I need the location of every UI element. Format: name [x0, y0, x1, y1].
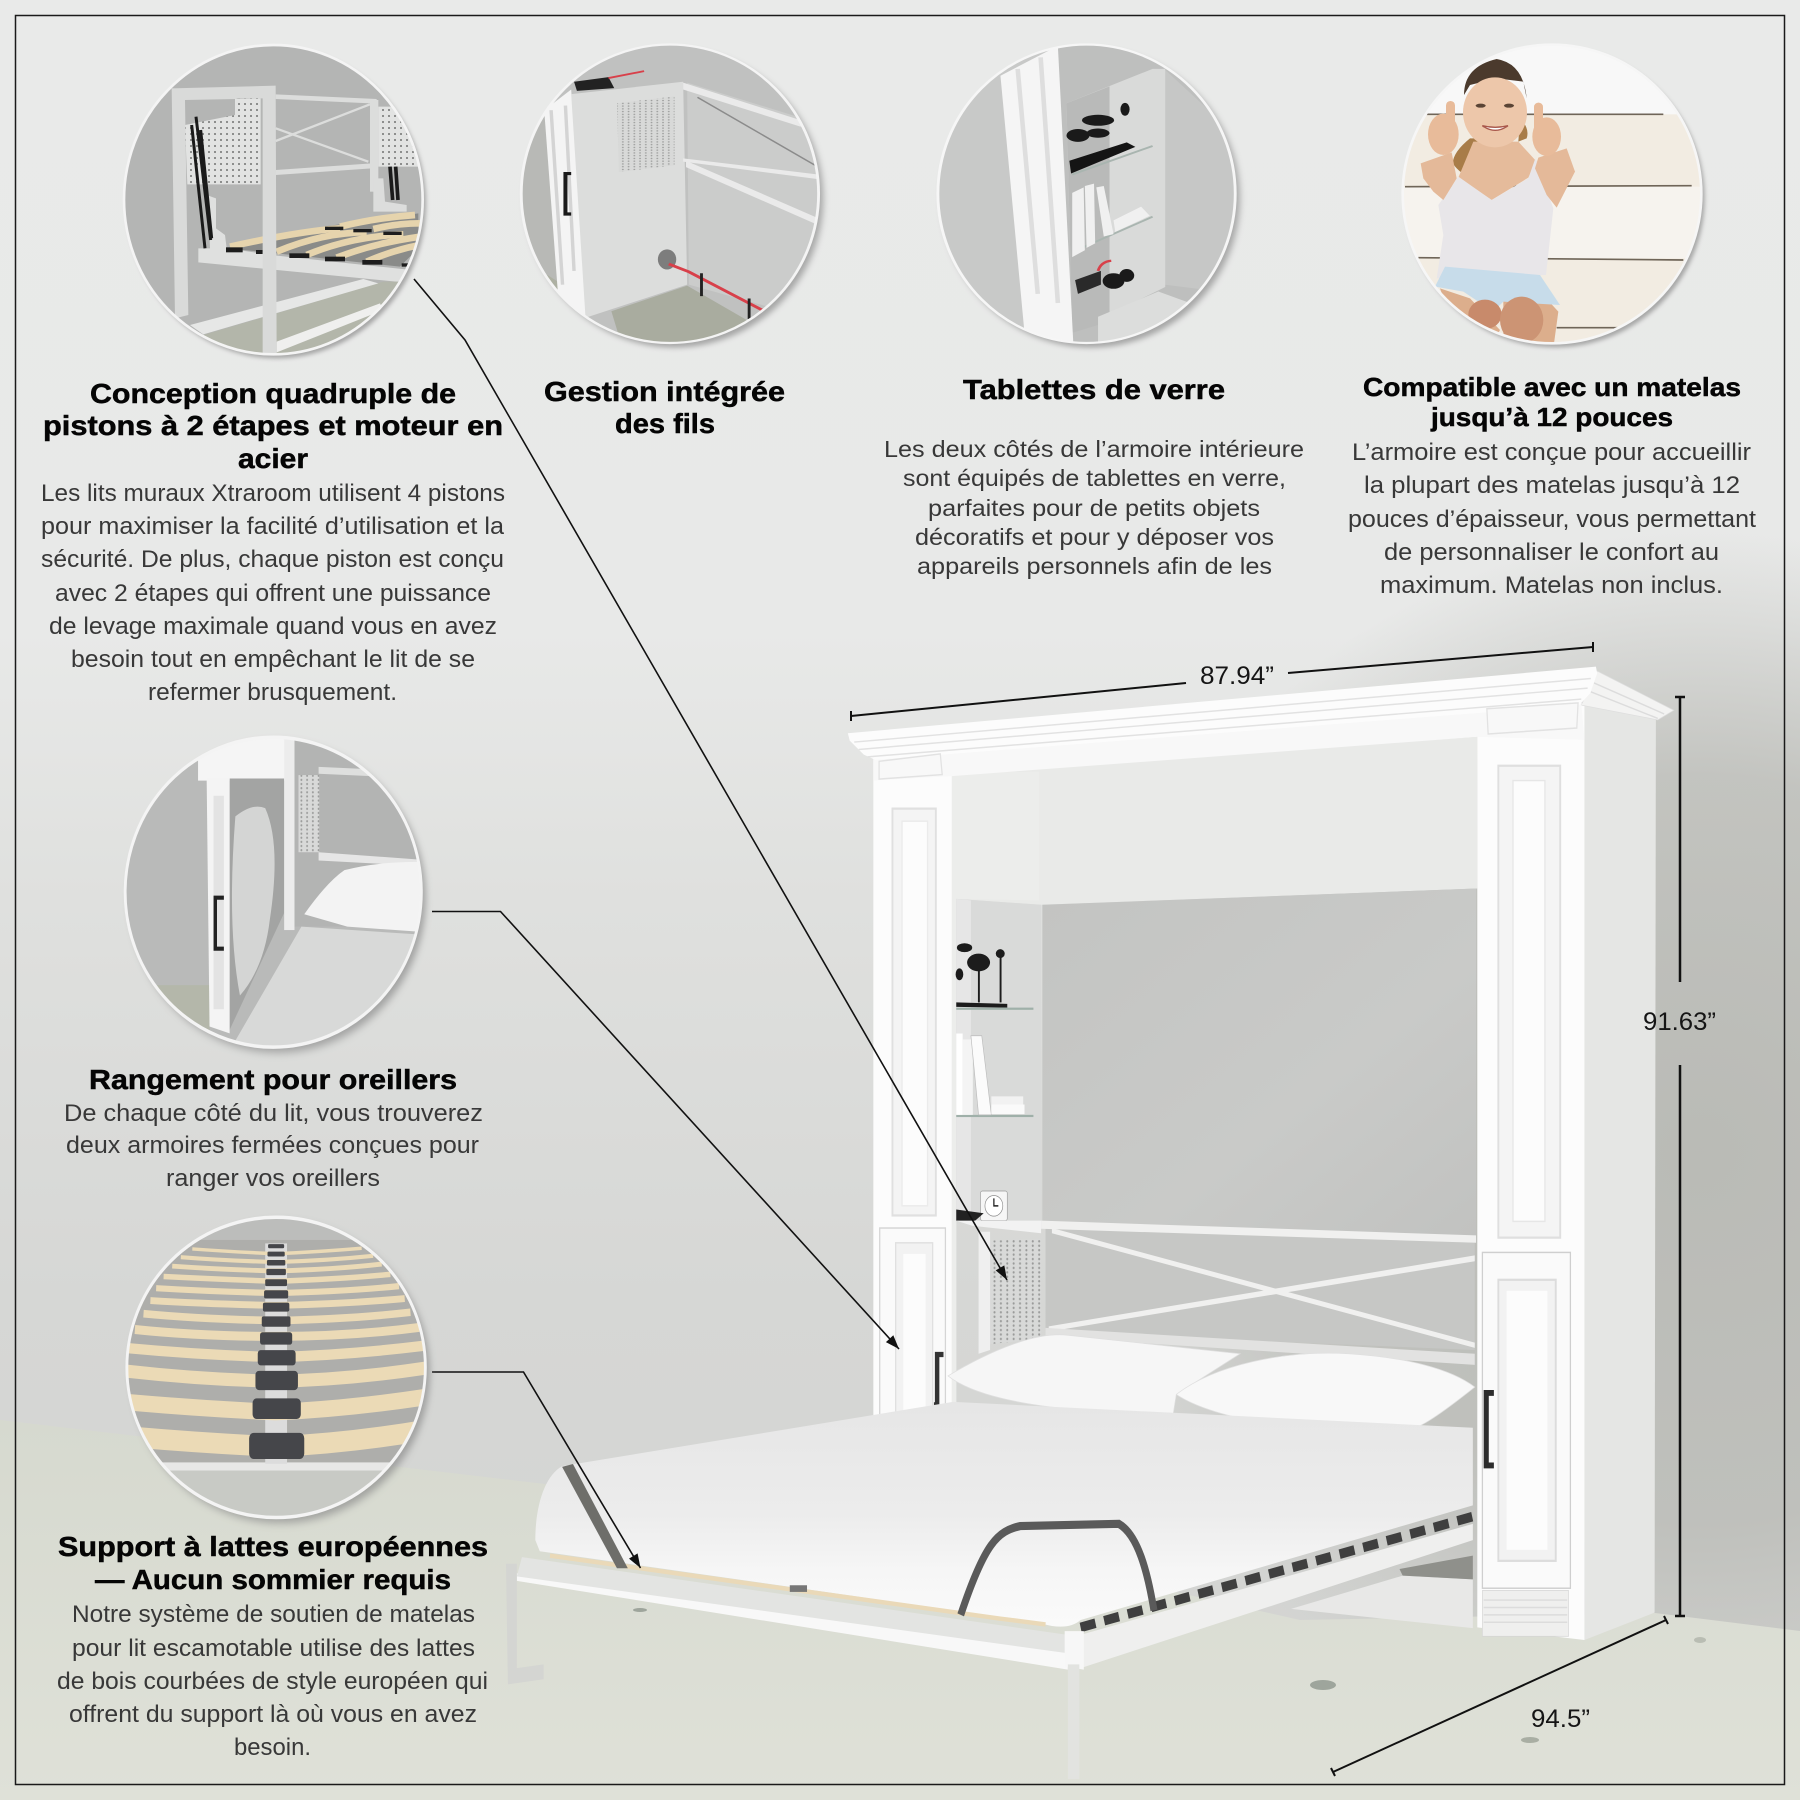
- body: glass shelves: appareils personnels afin de les: [917, 553, 1272, 579]
- left tower: [873, 755, 952, 1417]
- heading: european slats: Support à lattes européennes: [58, 1531, 488, 1562]
- heading: pillow storage: Rangement pour oreillers: [89, 1064, 457, 1095]
- body: european slats: Notre système de soutien de matelas: [72, 1601, 475, 1628]
- heading: wire management: Gestion intégrée: [544, 376, 785, 407]
- dimension: depth: [1331, 1616, 1668, 1776]
- body: mattress compatibility: pouces d’épaisseur, vous permettant: [1348, 506, 1756, 533]
- text block: european slats: [57, 1531, 488, 1761]
- right lower door: [1482, 1252, 1570, 1588]
- heading: mattress compatibility: Compatible avec un matelas: [1363, 372, 1741, 402]
- right tower: [1477, 703, 1584, 1640]
- body: glass shelves: parfaites pour de petits objets: [928, 495, 1260, 521]
- books on shelf: [956, 1033, 1024, 1115]
- cabinet interior upper back panel: [952, 737, 1477, 1409]
- heading: mattress compatibility: [1363, 372, 1741, 432]
- body: pistons: refermer brusquement.: [148, 679, 397, 706]
- circle photo: european slats: [123, 1212, 431, 1523]
- left door handle: [934, 1354, 943, 1405]
- alarm clock: [980, 1191, 1007, 1221]
- shelf nook: [956, 899, 1041, 1233]
- text block: pistons: [41, 378, 505, 706]
- body: pistons: avec 2 étapes qui offrent une puissance: [55, 580, 491, 607]
- plinth: [1482, 1590, 1569, 1636]
- bed frame rails: [506, 1524, 1473, 1779]
- heading: wire management: des fils: [615, 408, 715, 439]
- circle photo: pistons: [120, 42, 427, 358]
- sunglasses and charger: [956, 1210, 984, 1222]
- body: mattress compatibility: la plupart des matelas jusqu’à 12: [1364, 472, 1740, 499]
- background: concrete floor: [0, 1420, 1800, 1800]
- heading: pistons: acier: [238, 443, 308, 474]
- circle photo: glass shelves: [934, 41, 1242, 349]
- perforated panel: [990, 1239, 1041, 1344]
- body: pistons: pour maximiser la facilité d’utilisation et la: [41, 513, 505, 540]
- circle photo: wire management: [517, 41, 827, 349]
- headboard cross frame: [1041, 1221, 1476, 1365]
- mattress straps: [562, 1464, 1154, 1615]
- body: pistons: de levage maximale quand vous en avez: [49, 613, 497, 640]
- heading: glass shelves: Tablettes de verre: [963, 374, 1225, 405]
- circle photo: woman on mattresses: [1400, 42, 1707, 348]
- heading: mattress compatibility: jusqu’à 12 pouces: [1430, 402, 1673, 432]
- left leg: [506, 1564, 544, 1684]
- dimension: width: [851, 642, 1593, 721]
- heading: pistons: [43, 378, 503, 474]
- circle photo: pillow storage: [121, 734, 428, 1057]
- body: pillow storage: [64, 1100, 483, 1192]
- body: pillow storage: deux armoires fermées conçues pour: [66, 1132, 479, 1159]
- body: pistons: sécurité. De plus, chaque piston est conçu: [41, 546, 504, 573]
- body: pistons: [41, 480, 505, 706]
- body: pillow storage: De chaque côté du lit, vous trouverez: [64, 1100, 483, 1127]
- dimension label: 94.5: 94.5”: [1531, 1705, 1590, 1733]
- dimension label: 91.63: 91.63”: [1643, 1008, 1716, 1036]
- grey lower wall panel: [1046, 1228, 1475, 1350]
- body: glass shelves: sont équipés de tablettes en verre,: [903, 465, 1286, 491]
- crown molding: [848, 667, 1674, 781]
- bed under-panel: [1291, 1556, 1473, 1628]
- dimension label: 87.94: 87.94”: [1200, 662, 1274, 690]
- left inner side: [952, 772, 1039, 1409]
- leader arrow: slats: [432, 1372, 640, 1568]
- wall bed illustration: [506, 667, 1674, 1779]
- heading: wire management: [544, 376, 785, 439]
- body: european slats: offrent du support là où vous en avez: [69, 1701, 477, 1728]
- decorative birds on shelf: [956, 943, 1007, 1008]
- wood edge: [550, 1556, 1046, 1624]
- body: european slats: pour lit escamotable utilise des lattes: [72, 1635, 475, 1662]
- body: pillow storage: ranger vos oreillers: [166, 1165, 380, 1192]
- mattress: [535, 1402, 1473, 1627]
- body: mattress compatibility: de personnaliser le confort au: [1384, 539, 1719, 566]
- heading: pistons: Conception quadruple de: [90, 378, 456, 409]
- text block: glass shelves: [884, 374, 1304, 579]
- front leg: [1068, 1664, 1079, 1779]
- body: glass shelves: [884, 436, 1304, 579]
- body: glass shelves: Les deux côtés de l’armoire intérieure: [884, 436, 1304, 462]
- pillows: [948, 1335, 1475, 1437]
- text block: pillow storage: [64, 1064, 483, 1192]
- dimension: height: [1675, 697, 1685, 1616]
- body: glass shelves: décoratifs et pour y déposer vos: [915, 524, 1274, 550]
- heading: european slats: — Aucun sommier requis: [95, 1564, 451, 1595]
- body: mattress compatibility: maximum. Matelas non inclus.: [1380, 572, 1723, 599]
- heading: european slats: [58, 1531, 488, 1595]
- text block: mattress compatibility: [1348, 372, 1756, 599]
- bed slats along rail: [1081, 1516, 1473, 1627]
- body: european slats: de bois courbées de style européen qui: [57, 1668, 488, 1695]
- body: mattress compatibility: L’armoire est conçue pour accueillir: [1352, 439, 1751, 466]
- body: pistons: Les lits muraux Xtraroom utilisent 4 pistons: [41, 480, 505, 507]
- glass shelves: [956, 1008, 1033, 1117]
- cabinet right side face: [1581, 703, 1656, 1640]
- grey back wall panel: [1042, 889, 1476, 1241]
- heading: pistons: pistons à 2 étapes et moteur en: [43, 410, 503, 441]
- leader arrow: pillow storage: [432, 912, 899, 1349]
- body: pistons: besoin tout en empêchant le lit de se: [71, 646, 475, 673]
- body: european slats: besoin.: [234, 1734, 311, 1761]
- leader arrow: pistons: [414, 279, 1007, 1280]
- body: european slats: [57, 1601, 488, 1761]
- right door handle: [1486, 1393, 1494, 1465]
- body: mattress compatibility: [1348, 439, 1756, 599]
